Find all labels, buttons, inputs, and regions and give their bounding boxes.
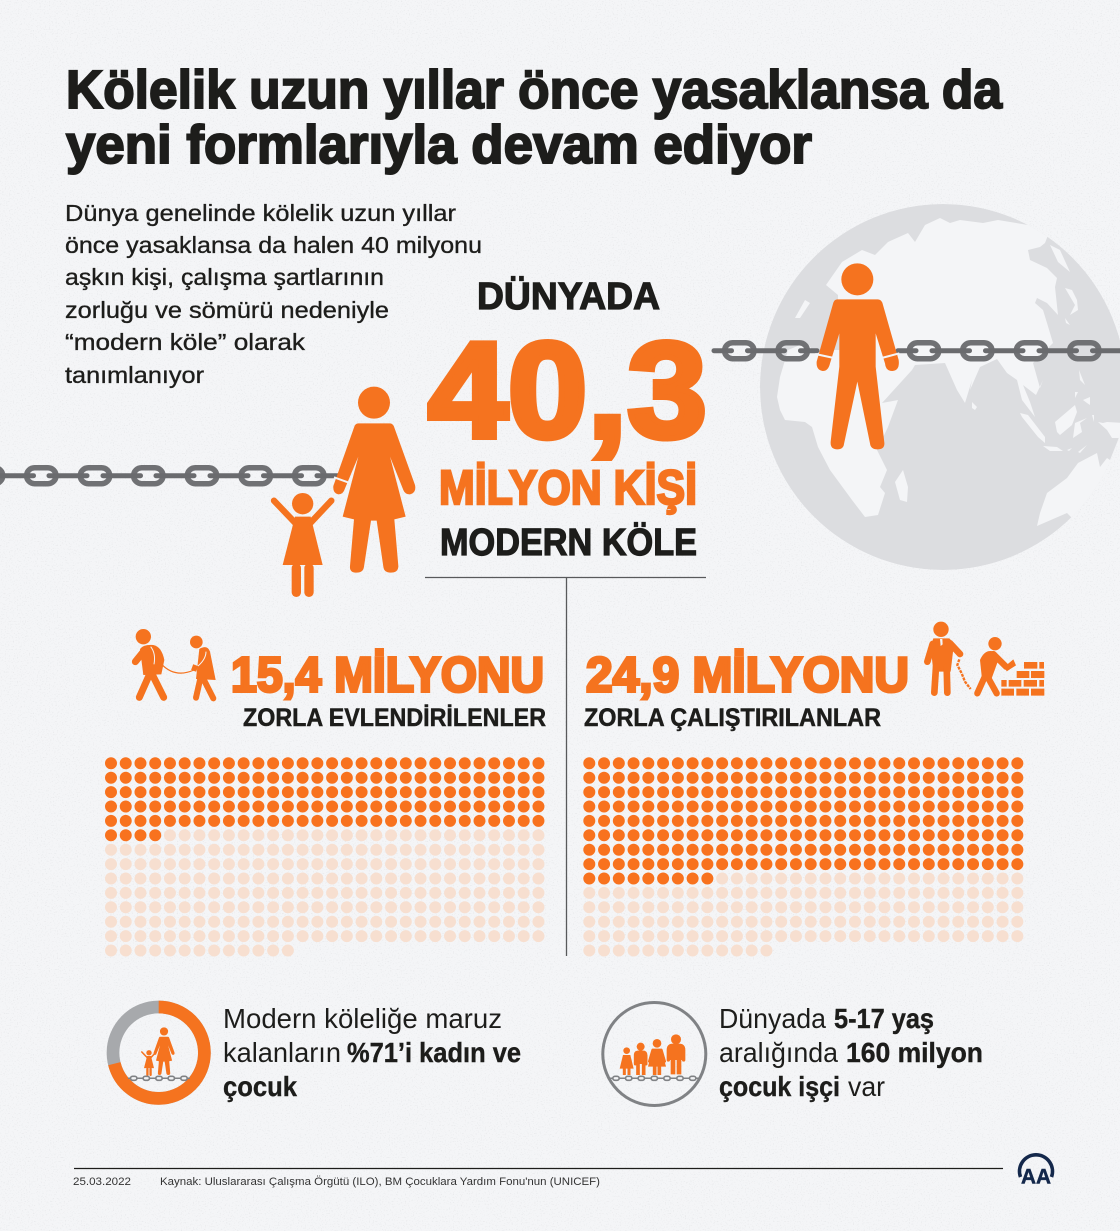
icon: forced marriage: [135, 629, 216, 698]
intro text: “modern köle” olarak: [65, 329, 306, 355]
headline: modern köle: MODERN KÖLE: [440, 521, 697, 564]
donut: 71 percent women and children: [113, 1007, 204, 1098]
icon: woman and child on chain: [128, 1027, 190, 1080]
text: child labour: Dünyada: [719, 1003, 826, 1034]
globe: [760, 204, 1120, 570]
icon: chained man: [815, 263, 899, 449]
logo: AA: AA: [1021, 1166, 1051, 1188]
intro text: önce yasaklansa da halen 40 milyonu: [65, 232, 482, 258]
intro text: tanımlanıyor: [65, 362, 204, 388]
intro text: aşkın kişi, çalışma şartlarının: [65, 264, 384, 290]
text: child labour: aralığında: [719, 1037, 838, 1068]
text: child labour: var: [848, 1071, 885, 1102]
dot grid: forced marriage: [111, 763, 539, 950]
text: women and children: %71’i kadın ve: [347, 1037, 521, 1068]
stat: 24,9 milyonu: ZORLA ÇALIŞTIRILANLAR: [584, 704, 881, 732]
divider lines: [425, 577, 706, 956]
text: women and children: kalanların: [223, 1037, 341, 1068]
chain: upper right: [714, 343, 1120, 359]
stat: 24,9 milyonu: [584, 648, 909, 732]
icon: child labour circle: [603, 1002, 706, 1106]
text: child labour: 5-17 yaş: [834, 1003, 934, 1034]
headline: dünyada: DÜNYADA: [477, 275, 660, 318]
chain: left: [0, 468, 338, 484]
stat: 15,4 milyonu: [231, 648, 546, 732]
text: women and children: Modern köleliğe maruz: [223, 1003, 502, 1034]
stat: 15,4 milyonu: 15,4 MİLYONU: [231, 648, 544, 702]
dot grid: forced labour: [589, 763, 1018, 950]
title: [66, 60, 1003, 175]
footer date and source: 25.03.2022: [73, 1176, 131, 1188]
logo: AA: [1020, 1155, 1052, 1188]
headline: milyon kişi: MİLYON KİŞİ: [439, 462, 697, 515]
stat: 15,4 milyonu: ZORLA EVLENDİRİLENLER: [243, 704, 546, 732]
text: women and children: çocuk: [223, 1071, 297, 1102]
text: women and children: [223, 1003, 521, 1102]
title: Kölelik uzun yıllar önce yasaklansa da: [66, 60, 1003, 120]
intro text: zorluğu ve sömürü nedeniyle: [65, 297, 389, 323]
icon: forced labour: [927, 622, 1044, 696]
stat: 24,9 milyonu: 24,9 MİLYONU: [586, 648, 909, 702]
title: yeni formlarıyla devam ediyor: [66, 115, 812, 175]
big number 40,3: 40,3: [428, 314, 707, 466]
icon: four figures: [620, 1034, 684, 1075]
footer date and source: Kaynak: Uluslararası Çalışma Örgütü (ILO), BM Çocuklara Yardım Fonu'nun (UNICEF): [160, 1176, 600, 1188]
footer rule: [74, 1168, 1003, 1170]
icon: chained woman and child: [274, 387, 415, 597]
text: child labour: çocuk işçi: [719, 1071, 840, 1102]
intro text: [65, 200, 482, 388]
intro text: Dünya genelinde kölelik uzun yıllar: [65, 200, 456, 226]
text: child labour: 160 milyon: [846, 1037, 983, 1068]
text: child labour: [719, 1003, 983, 1102]
